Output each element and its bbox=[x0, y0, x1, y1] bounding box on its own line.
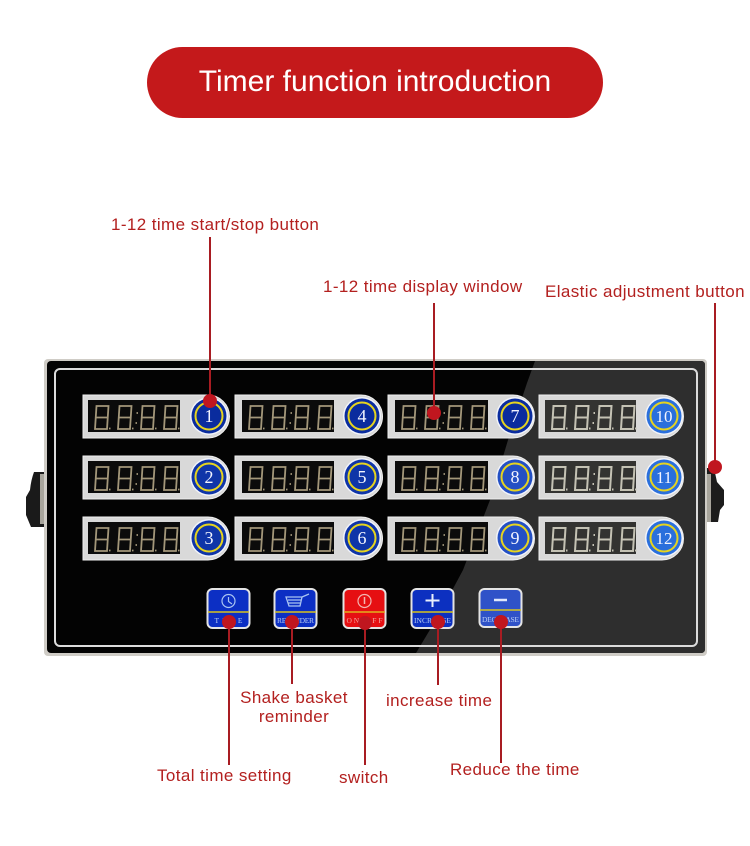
timer 8 bbox=[388, 456, 534, 499]
button: on/off: ON/OFF bbox=[346, 616, 382, 625]
timer 2 bbox=[83, 456, 230, 499]
callout: switch bbox=[339, 616, 389, 787]
device front face bbox=[47, 361, 705, 653]
timer 4 bbox=[235, 395, 382, 438]
timer 3: 3 bbox=[204, 528, 214, 548]
timer 12 bbox=[539, 517, 684, 560]
button: increase bbox=[412, 589, 454, 628]
timer 2: 2 bbox=[204, 467, 214, 487]
callout: reduce the time bbox=[450, 615, 580, 779]
glossy reflection bbox=[416, 361, 705, 653]
callout: shake basket reminder bbox=[240, 615, 348, 726]
callout: increase time: increase time bbox=[386, 691, 492, 710]
timer 11: 11 bbox=[656, 468, 672, 487]
left adjustment knob bbox=[26, 472, 44, 527]
timer device bbox=[44, 359, 707, 656]
callout: start/stop button: 1-12 time start/stop button bbox=[111, 215, 319, 234]
callout: total time setting: Total time setting bbox=[157, 766, 292, 785]
right adjustment knob bbox=[707, 468, 724, 522]
timer 9 bbox=[388, 517, 534, 560]
timer 10: 10 bbox=[656, 407, 672, 426]
timer 6: 6 bbox=[358, 528, 366, 548]
callout: switch: switch bbox=[339, 768, 389, 787]
timer 12: 12 bbox=[656, 529, 672, 548]
title banner: Timer function introduction bbox=[199, 65, 551, 98]
timer 5 bbox=[235, 456, 382, 499]
timer 8: 8 bbox=[510, 467, 520, 487]
callout: display window: 1-12 time display window bbox=[323, 277, 523, 296]
title banner bbox=[147, 47, 603, 118]
button: increase: INCREASE bbox=[414, 616, 451, 625]
timer 1: 1 bbox=[204, 406, 214, 426]
callout: increase time bbox=[386, 615, 492, 710]
timer 10 bbox=[539, 395, 684, 438]
timer 7 bbox=[388, 395, 534, 438]
timer 5: 5 bbox=[358, 467, 366, 487]
button: decrease: DECREASE bbox=[482, 615, 519, 624]
timer 9: 9 bbox=[510, 528, 520, 548]
timer 7: 7 bbox=[510, 406, 520, 426]
button: on/off bbox=[344, 589, 386, 628]
callout: display window bbox=[323, 277, 523, 420]
button: reminder bbox=[274, 589, 316, 628]
callout: reduce the time: Reduce the time bbox=[450, 760, 580, 779]
device casing bbox=[44, 359, 707, 656]
button: reminder: REMINDER bbox=[277, 616, 314, 625]
callout: elastic adjustment button: Elastic adjustment button bbox=[545, 282, 745, 301]
timer 4: 4 bbox=[358, 406, 366, 426]
button: time bbox=[208, 589, 250, 628]
callout: shake basket reminder: Shake basket bbox=[240, 688, 348, 707]
timer 3 bbox=[83, 517, 230, 560]
button: decrease bbox=[480, 589, 522, 627]
callout: start/stop button bbox=[111, 215, 319, 408]
timer 6 bbox=[235, 517, 382, 560]
timer 11 bbox=[539, 456, 684, 499]
button: time: TIME bbox=[214, 616, 243, 625]
inner border bbox=[55, 369, 697, 646]
callout: shake basket reminder: reminder bbox=[259, 707, 329, 726]
callout: elastic adjustment button bbox=[545, 282, 745, 474]
callout: total time setting bbox=[157, 615, 292, 785]
timer 1 bbox=[83, 395, 230, 438]
